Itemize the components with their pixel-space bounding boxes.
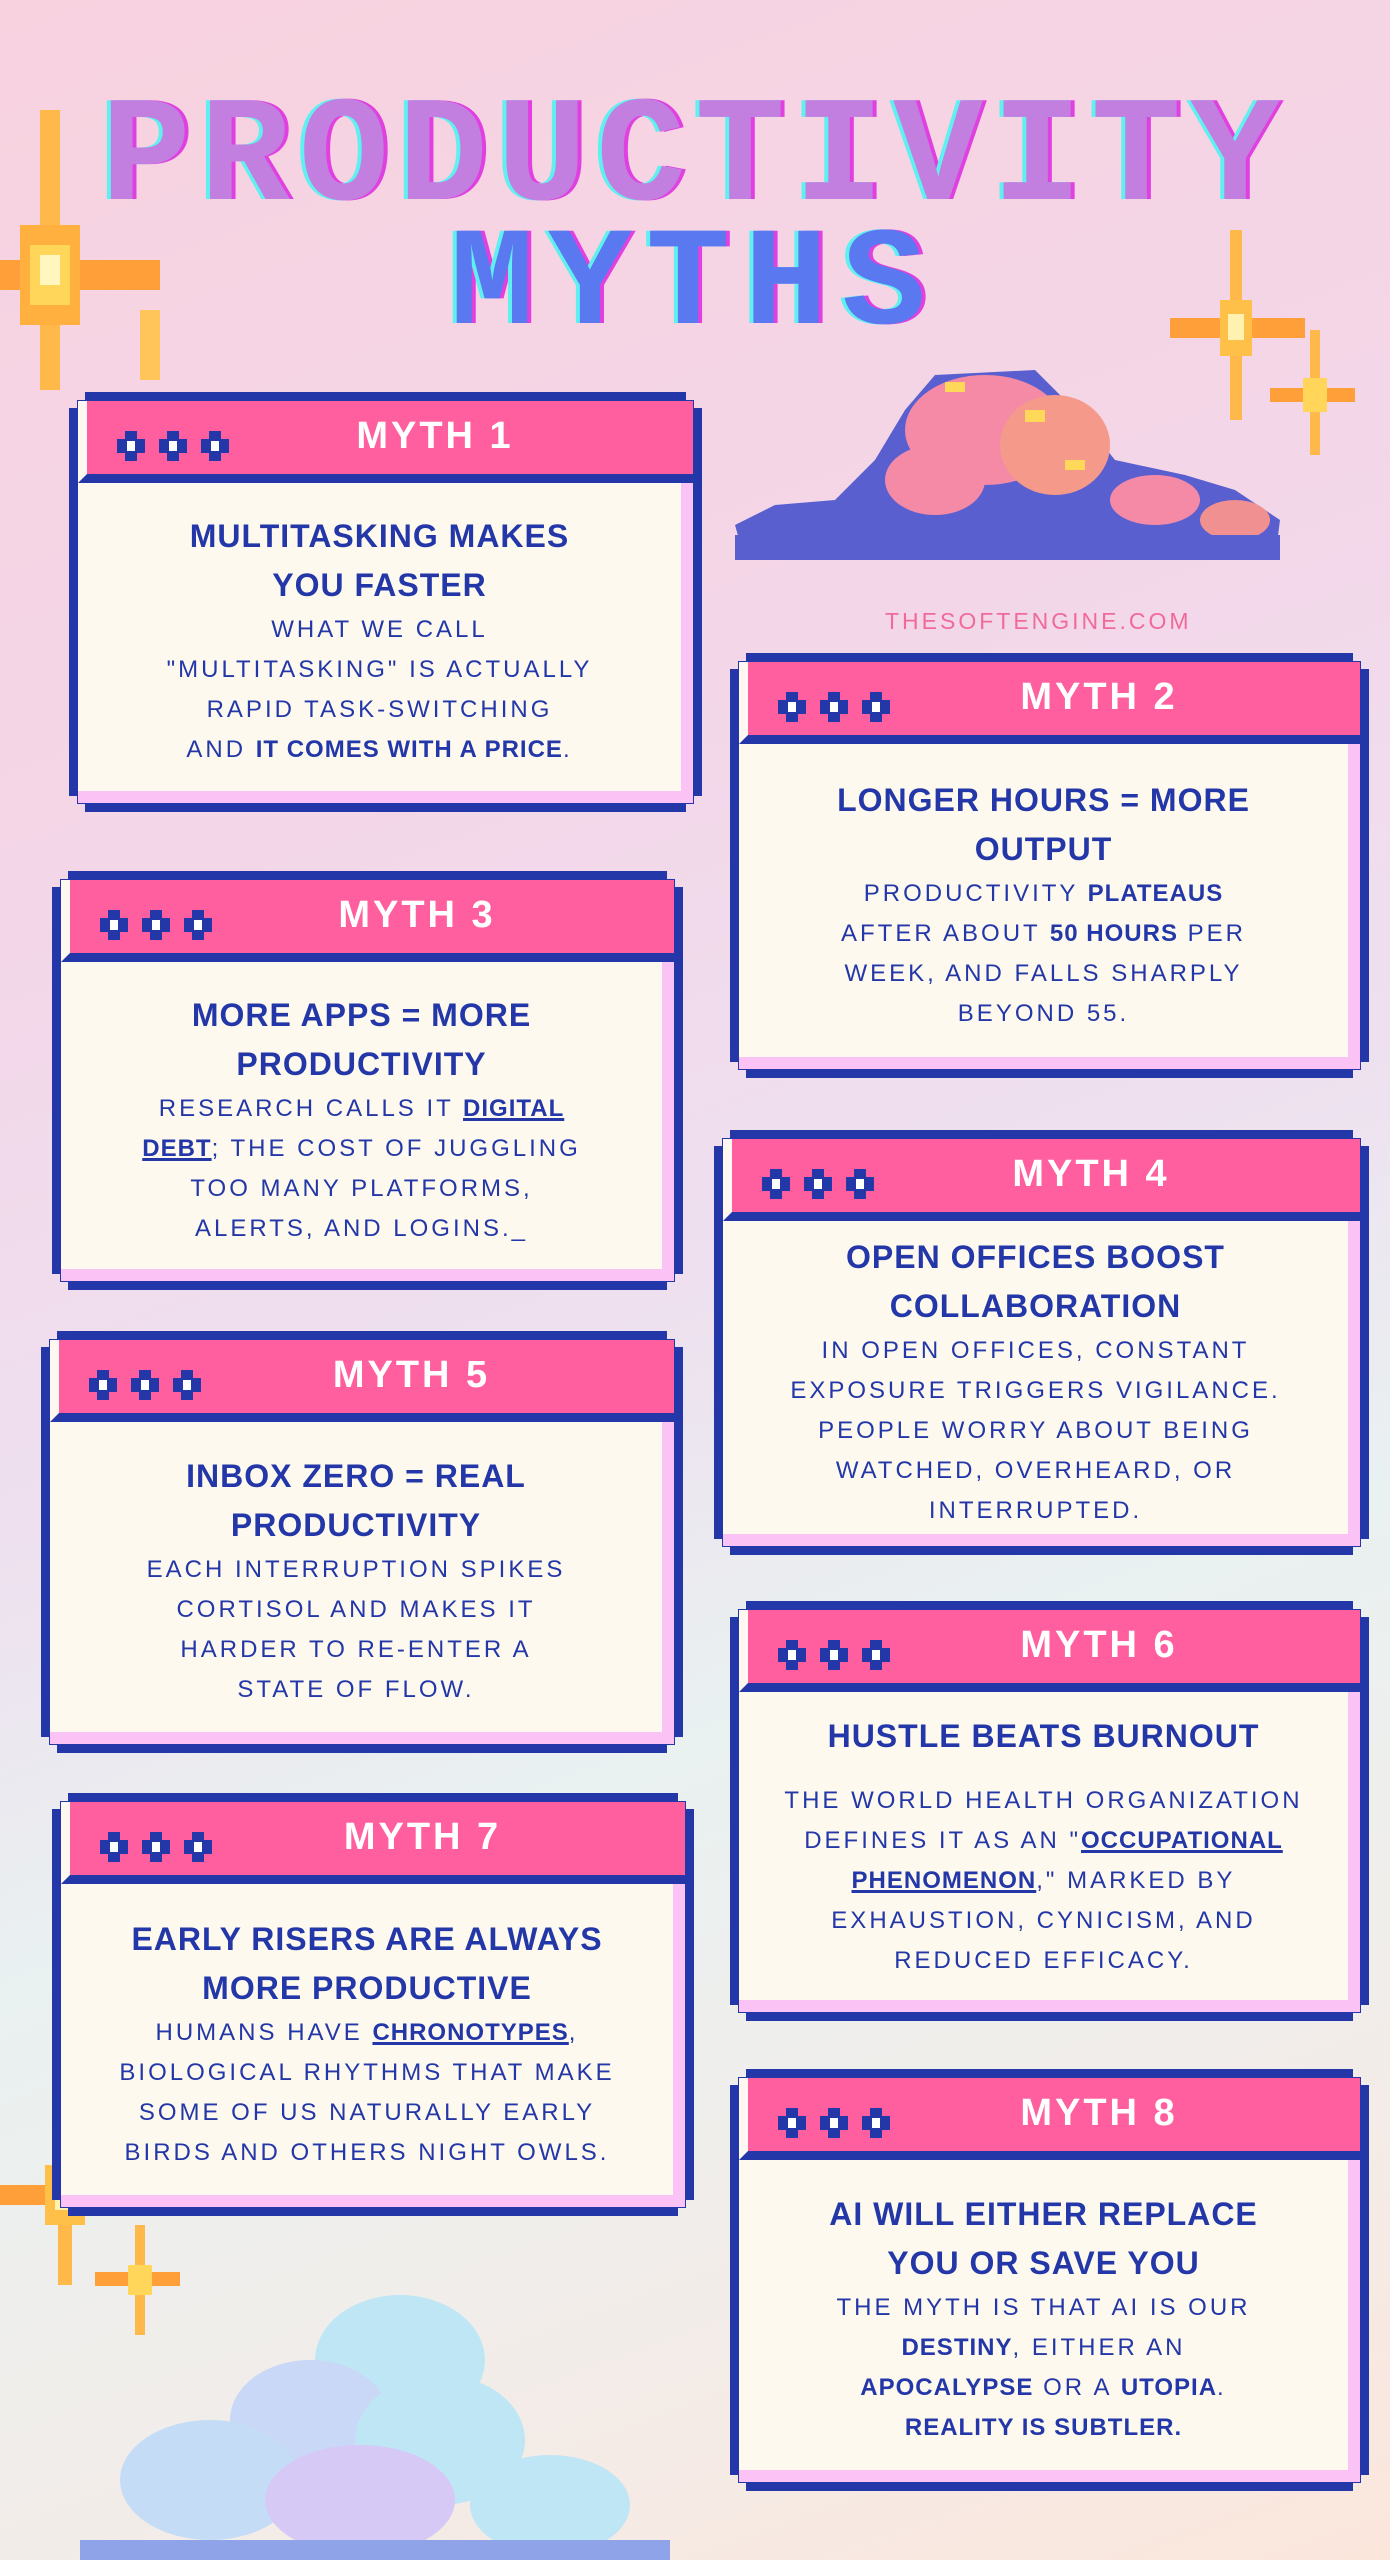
panel: myth 1: [69, 392, 702, 812]
text: myth 6: THE WORLD HEALTH ORGANIZATION: [784, 1787, 1303, 1814]
text: myth 7: HUMANS HAVE CHRONOTYPES,: [156, 2018, 578, 2046]
header: myth 1: [78, 401, 693, 483]
text: myth 1: YOU FASTER: [272, 567, 487, 603]
text: myth 8: APOCALYPSE OR A UTOPIA.: [860, 2374, 1227, 2401]
text: myth 1: [168, 524, 589, 757]
text: myth 7: EARLY RISERS ARE ALWAYS: [131, 1920, 603, 1956]
header: myth 8: [739, 2078, 1360, 2160]
text: myth 5: CORTISOL AND MAKES IT: [176, 1596, 536, 1623]
text: myth 2: PRODUCTIVITY PLATEAUS: [864, 880, 1223, 906]
text: myth 2: BEYOND 55.: [958, 1000, 1129, 1026]
text: myth 5: INBOX ZERO = REAL: [186, 1458, 526, 1494]
icon: blue cloud: [80, 2295, 670, 2560]
text: myth 1: WHAT WE CALL: [271, 616, 488, 643]
text: myth 3: TOO MANY PLATFORMS,: [190, 1174, 533, 1202]
text: myth 2: LONGER HOURS = MORE: [837, 782, 1250, 818]
text: myth 8: AI WILL EITHER REPLACE: [829, 2196, 1258, 2232]
watermark: THESOFTENGINE.COM: [885, 608, 1192, 634]
text: myth 1: AND IT COMES WITH A PRICE.: [186, 736, 573, 763]
text: myth 4: INTERRUPTED.: [929, 1496, 1142, 1524]
header: myth 5: [50, 1340, 674, 1422]
header: myth 6: MYTH 6: [1020, 1624, 1178, 1666]
text: myth 6: PHENOMENON," MARKED BY: [852, 1867, 1235, 1894]
panel: myth 8: [730, 2069, 1369, 2491]
text: myth 3: MORE APPS = MORE: [192, 996, 531, 1032]
text: myth 8: THE MYTH IS THAT AI IS OUR: [836, 2294, 1251, 2321]
text: myth 5: HARDER TO RE-ENTER A: [180, 1636, 532, 1663]
text: myth 1: MULTITASKING MAKES: [190, 518, 569, 554]
icon: pink cloud: [735, 370, 1280, 560]
header: myth 4: MYTH 4: [1012, 1153, 1170, 1195]
header: myth 3: [61, 880, 674, 962]
panel: myth 6: [730, 1601, 1369, 2021]
icon: sparkle large left: [0, 110, 160, 390]
text: myth 8: [830, 2202, 1256, 2435]
header: myth 1: MYTH 1: [356, 415, 514, 457]
header: myth 6: [739, 1610, 1360, 1692]
panel: myth 3: [52, 871, 683, 1290]
text: myth 2: WEEK, AND FALLS SHARPLY: [844, 960, 1242, 986]
header: myth 5: MYTH 5: [333, 1354, 490, 1396]
panel: myth 4: [714, 1130, 1369, 1555]
text: myth 7: BIRDS AND OTHERS NIGHT OWLS.: [125, 2138, 609, 2166]
text: myth 7: MORE PRODUCTIVE: [202, 1970, 532, 2006]
title: productivity: PRODUCTIVITY: [101, 75, 1289, 245]
text: myth 3: DEBT; THE COST OF JUGGLING: [142, 1134, 581, 1162]
text: myth 3: RESEARCH CALLS IT DIGITAL: [159, 1094, 564, 1122]
header: myth 7: [61, 1802, 685, 1884]
text: myth 3: ALERTS, AND LOGINS._: [195, 1214, 528, 1242]
header: myth 3: MYTH 3: [338, 894, 496, 936]
text: myth 5: [148, 1464, 562, 1697]
text: myth 3: [142, 1003, 576, 1241]
text: myth 7: [121, 1927, 611, 2160]
text: myth 3: PRODUCTIVITY: [236, 1046, 487, 1082]
panel: myth 7: [52, 1793, 694, 2216]
icon: sparkles right: [1170, 230, 1355, 455]
text: myth 4: EXPOSURE TRIGGERS VIGILANCE.: [790, 1376, 1281, 1404]
text: myth 6: DEFINES IT AS AN "OCCUPATIONAL: [804, 1827, 1283, 1854]
panel: myth 5: [41, 1331, 683, 1753]
text: myth 1: "MULTITASKING" IS ACTUALLY: [167, 656, 592, 683]
text: myth 8: YOU OR SAVE YOU: [887, 2245, 1200, 2281]
header: myth 4: [723, 1139, 1360, 1221]
text: myth 2: OUTPUT: [975, 830, 1112, 866]
text: myth 5: STATE OF FLOW.: [237, 1676, 475, 1703]
title: myths: MYTHS: [450, 207, 940, 366]
text: myth 6: REDUCED EFFICACY.: [894, 1947, 1193, 1974]
text: myth 4: [792, 1245, 1276, 1518]
text: myth 2: AFTER ABOUT 50 HOURS PER: [841, 920, 1246, 946]
text: myth 5: EACH INTERRUPTION SPIKES: [147, 1556, 565, 1583]
text: myth 6: HUSTLE BEATS BURNOUT: [828, 1718, 1259, 1754]
header: myth 7: MYTH 7: [344, 1816, 501, 1858]
text: myth 8: REALITY IS SUBTLER.: [905, 2414, 1182, 2441]
text: myth 4: WATCHED, OVERHEARD, OR: [836, 1456, 1235, 1484]
header: myth 2: MYTH 2: [1020, 676, 1178, 718]
panel: myth 2: [730, 653, 1369, 1078]
text: myth 7: SOME OF US NATURALLY EARLY: [139, 2098, 595, 2126]
text: myth 7: BIOLOGICAL RHYTHMS THAT MAKE: [119, 2058, 615, 2086]
header: myth 8: MYTH 8: [1020, 2092, 1178, 2134]
text: myth 1: RAPID TASK-SWITCHING: [207, 696, 552, 723]
icon: sparkles bottom left: [0, 2165, 180, 2335]
text: myth 4: OPEN OFFICES BOOST: [846, 1238, 1225, 1274]
text: myth 4: IN OPEN OFFICES, CONSTANT: [822, 1336, 1249, 1364]
text: myth 6: EXHAUSTION, CYNICISM, AND: [831, 1907, 1256, 1934]
text: myth 2: [839, 788, 1248, 1021]
text: myth 8: DESTINY, EITHER AN: [901, 2334, 1186, 2361]
text: myth 5: PRODUCTIVITY: [231, 1507, 481, 1543]
text: myth 6: [784, 1724, 1298, 1968]
header: myth 2: [739, 662, 1360, 744]
text: myth 4: PEOPLE WORRY ABOUT BEING: [818, 1416, 1253, 1444]
text: myth 4: COLLABORATION: [890, 1288, 1181, 1324]
